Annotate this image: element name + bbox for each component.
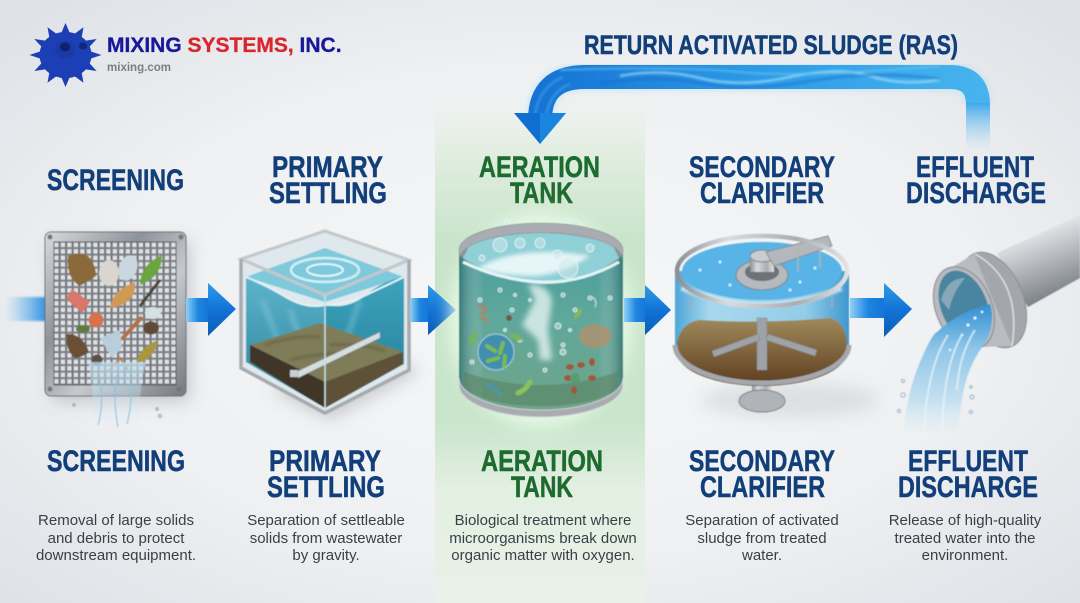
caption: primary settling: solids from wastewater (250, 530, 402, 547)
heading: screening: SCREENING (47, 164, 184, 197)
caption: primary settling: Separation of settleable (247, 512, 405, 529)
caption: effluent discharge: Release of high-quality (889, 512, 1042, 529)
caption: primary settling: PRIMARY (269, 445, 381, 478)
panel: highlighted aeration column (435, 85, 645, 603)
support foot (739, 380, 785, 412)
heading: return activated sludge: RETURN ACTIVATED SLUDGE (RAS) (584, 30, 958, 60)
arrow: settling to aeration (410, 285, 456, 335)
heading: aeration tank: TANK (510, 177, 573, 210)
caption: secondary clarifier: Separation of activated (685, 512, 839, 529)
icon: blue gear (30, 23, 102, 87)
caption: secondary clarifier: SECONDARY (689, 445, 835, 478)
caption: primary settling: by gravity. (292, 547, 360, 564)
bubble plume (522, 284, 552, 360)
caption: secondary clarifier: sludge from treated (697, 530, 827, 547)
heading: secondary clarifier: SECONDARY (689, 151, 835, 184)
stage label row: top headings (47, 151, 1046, 210)
caption: screening: Removal of large solids (38, 512, 194, 529)
heading: primary settling: SETTLING (269, 177, 387, 210)
caption: aeration tank (449, 445, 637, 564)
heading: aeration tank: AERATION (479, 151, 600, 184)
arrow: screening to settling (186, 283, 236, 336)
caption: primary settling: SETTLING (267, 471, 385, 504)
caption: secondary clarifier (685, 445, 839, 564)
arrow: clarifier to effluent (850, 283, 912, 337)
central hub and bridge (736, 236, 832, 290)
brand name: MIXING SYSTEMS, INC. (107, 34, 342, 57)
caption: screening: and debris to protect (48, 530, 185, 547)
heading: secondary clarifier: CLARIFIER (700, 177, 824, 210)
logo: Mixing Systems (30, 23, 342, 87)
arrow: inflow into screen (5, 297, 47, 321)
heading: effluent discharge (906, 151, 1046, 210)
caption: effluent discharge: EFFLUENT (908, 445, 1028, 478)
arrow: RAS return loop (514, 66, 990, 150)
caption: aeration tank: Biological treatment where (455, 512, 631, 529)
caption: aeration tank: organic matter with oxygen. (451, 547, 635, 564)
caption: screening: SCREENING (47, 445, 185, 478)
panel: lower captions (36, 445, 1042, 564)
heading: primary settling (269, 151, 387, 210)
heading: effluent discharge: EFFLUENT (916, 151, 1034, 184)
debris items (66, 253, 162, 372)
caption: effluent discharge (889, 445, 1042, 564)
heading: primary settling: PRIMARY (272, 151, 383, 184)
caption: aeration tank: AERATION (481, 445, 603, 478)
caption: aeration tank: TANK (511, 471, 573, 504)
caption: screening: downstream equipment. (36, 547, 196, 564)
illustration: primary settling tank (241, 231, 420, 420)
caption: screening (36, 445, 196, 564)
illustration: discharge pipe (898, 215, 1080, 432)
clarifier rims (677, 236, 847, 306)
tank rim (459, 223, 623, 258)
heading: secondary clarifier (689, 151, 835, 210)
falling water (73, 362, 162, 427)
caption: effluent discharge: environment. (922, 547, 1008, 564)
sweep arm (712, 318, 817, 370)
microorganisms (467, 297, 611, 395)
caption: secondary clarifier: CLARIFIER (700, 471, 825, 504)
arrow: aeration to clarifier (624, 285, 671, 335)
website: mixing.com (107, 60, 171, 74)
caption: aeration tank: microorganisms break down (449, 530, 637, 547)
caption: secondary clarifier: water. (741, 547, 782, 564)
illustration: secondary clarifier (675, 236, 880, 418)
caption: primary settling (247, 445, 405, 564)
caption: effluent discharge: treated water into the (895, 530, 1035, 547)
illustration: aeration tank (449, 212, 633, 428)
water stream (903, 304, 992, 432)
heading: aeration tank (479, 151, 600, 210)
caption: effluent discharge: DISCHARGE (898, 471, 1038, 504)
illustration: screening mesh (45, 232, 190, 427)
